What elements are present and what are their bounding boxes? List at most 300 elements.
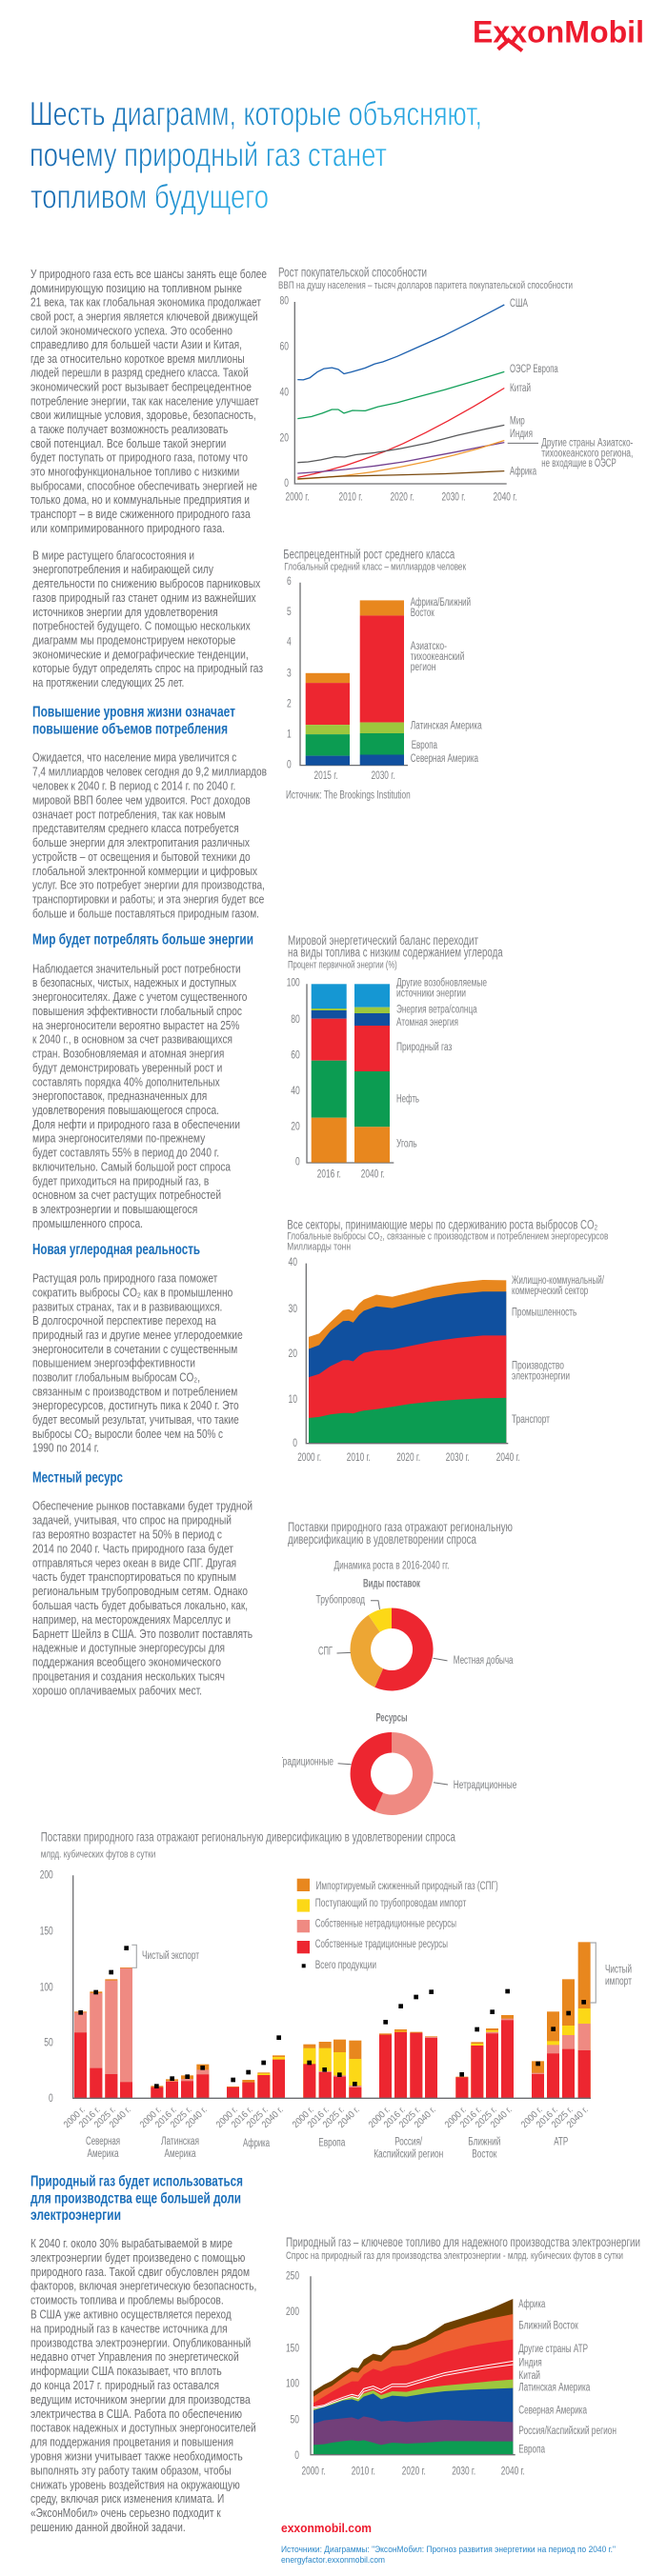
text block: power generation: информации США показывает, что вплоть <box>30 2365 222 2378</box>
rotated year labels: 2016 г. <box>306 2105 332 2130</box>
region labels <box>86 2136 568 2161</box>
text block: living standards: мировой ВВП более чем удвоится. Рост доходов <box>32 793 251 807</box>
area labels: Северная Америка <box>518 2405 587 2416</box>
rotated year labels: 2016 г. <box>77 2105 103 2130</box>
area labels: Европа <box>518 2444 545 2455</box>
callout: net export: Чистый экспорт <box>142 1950 200 1962</box>
text block: carbon reality: энергоресурсов, достигнуть пика к 2040 г. Это <box>32 1399 239 1412</box>
text block: introduction: доминирующую позицию на топливном рынке <box>30 282 242 295</box>
text block: living standards: 7,4 миллиардов человек сегодня до 9,2 миллиардов <box>32 766 267 779</box>
donut labels: supply types: Трубопровод <box>316 1595 365 1607</box>
region labels: Африка <box>243 2138 270 2149</box>
bar labels: Восток <box>411 608 435 619</box>
bar 2030 <box>360 600 404 766</box>
series labels <box>508 298 633 478</box>
donut heading: supply types: Виды поставок <box>363 1578 420 1589</box>
footer: sources: energyfactor.exxonmobil.com <box>281 2555 385 2566</box>
line chart: purchasing power <box>278 265 633 503</box>
text block: living standards <box>32 751 267 920</box>
text block: more energy: Доля нефти и природного газа в обеспечении <box>32 1118 240 1131</box>
text block: more energy: основном за счет растущих потребностей <box>32 1188 221 1202</box>
chart subtitle: млрд. кубических футов в сутки <box>41 1849 155 1861</box>
y axis labels <box>287 576 292 771</box>
text block: more energy: стран. Возобновляемая и атомная энергия <box>32 1048 224 1061</box>
text block: power generation: электроэнергии будет произведено с помощью <box>30 2251 245 2265</box>
text block: carbon reality: В долгосрочной перспективе переход на <box>32 1314 216 1328</box>
text block: living standards: Ожидается, что население мира увеличится с <box>32 751 236 765</box>
text block: introduction: транспорт – в виде сжиженного природного газа <box>30 508 251 521</box>
rotated year labels: 2025 г. <box>474 2105 499 2130</box>
text block: power generation: ведущим источником энергии для производства <box>30 2393 251 2406</box>
text block: more energy: составлять порядка 40% дополнительных <box>32 1075 220 1088</box>
text block: more energy: энергопоставок, предназначенных для <box>32 1089 207 1103</box>
y axis labels: 20 <box>291 1122 300 1133</box>
text block: introduction: людей перешли в разряд среднего класса. Такой <box>30 367 249 380</box>
donut labels: resources <box>272 1755 516 1791</box>
text block: carbon reality: развитых странах, так и в развивающихся. <box>32 1300 222 1313</box>
text block: carbon reality: сократить выбросы CO₂ как в промышленно <box>32 1286 232 1299</box>
axes <box>294 302 507 484</box>
bar labels: Северная Америка <box>411 753 478 765</box>
heading: power generation: для производства еще большей доли <box>30 2190 241 2207</box>
y axis labels: 3 <box>287 669 292 680</box>
rotated year labels: 2000 г. <box>291 2105 316 2130</box>
bars: Europe <box>303 2040 361 2098</box>
bar labels: регион <box>411 662 435 673</box>
text block: more energy: будут демонстрировать уверенный рост и <box>32 1061 222 1074</box>
y axis labels: 10 <box>288 1394 297 1406</box>
text block: carbon reality: будет весомый результат, учитывая, что такие <box>32 1413 239 1427</box>
text block: power generation: выполнять эту работу таким образом, чтобы <box>30 2464 232 2477</box>
x axis labels <box>297 1452 520 1464</box>
chart subtitle: ВВП на душу населения – тысяч долларов паритета покупательской способности <box>278 280 573 291</box>
area labels: электроэнергии <box>512 1371 570 1383</box>
region labels: Ближний <box>468 2136 500 2147</box>
x axis labels: 2040 г. <box>361 1168 385 1180</box>
area labels: Транспорт <box>512 1414 551 1426</box>
text block: more energy: промышленного спроса. <box>32 1217 143 1230</box>
callout: net import: Чистый <box>605 1965 632 1976</box>
text block: more energy: Наблюдается значительный рост потребности <box>32 962 241 975</box>
heading: living standards: повышение объемов потребления <box>32 722 228 737</box>
area labels: Промышленность <box>512 1307 576 1318</box>
chart title: на виды топлива с низким содержанием углерода <box>288 945 503 960</box>
y axis labels: 50 <box>290 2415 299 2426</box>
text block: more energy: будет приходиться на природный газ, в <box>32 1174 210 1188</box>
text block: second paragraph: диаграмм мы продемонстрируем некоторые <box>32 634 235 648</box>
rotated year labels: 2025 г. <box>397 2105 423 2130</box>
area chart: CO2 emissions <box>287 1217 608 1464</box>
stacked bar chart: middle class <box>283 547 482 801</box>
x axis labels: 2040 г. <box>496 1452 520 1464</box>
x axis labels: 2000 г. <box>297 1452 321 1464</box>
text block: more energy: энергоносителях. Даже с учетом существенного <box>32 990 247 1004</box>
text block: introduction: а также получает возможность реализовать <box>30 423 228 436</box>
region labels: Северная <box>86 2136 120 2147</box>
axis <box>73 1875 591 2098</box>
text block: living standards: представителям среднего класса потребуется <box>32 822 239 835</box>
y axis labels: 80 <box>280 295 289 307</box>
text block: carbon reality: природный газ и другие менее углеродоемкие <box>32 1328 243 1342</box>
donut labels: supply types: СПГ <box>318 1646 333 1657</box>
text block: second paragraph: деятельности по снижению выбросов парниковых <box>32 577 261 590</box>
y axis labels: 40 <box>291 1086 300 1097</box>
area labels: Китай <box>518 2370 540 2382</box>
text block: local resource: Барнетт Шейлз в США. Это позволит поставлять <box>32 1627 253 1641</box>
heading: power generation <box>30 2173 243 2224</box>
source: Источник: The Brookings Institution <box>286 789 411 801</box>
text block: carbon reality: Растущая роль природного газа поможет <box>32 1272 218 1286</box>
text block: second paragraph: на протяжении следующих 25 лет. <box>32 676 184 689</box>
bar labels: Латинская Америка <box>411 720 482 731</box>
axis <box>307 984 394 1163</box>
y axis labels: 250 <box>286 2271 299 2283</box>
text block: power generation: К 2040 г. около 30% вырабатываемой в мире <box>30 2237 232 2250</box>
y axis labels: 80 <box>291 1014 300 1026</box>
text block: carbon reality: связанным с производством и потреблением <box>32 1385 237 1398</box>
text block: local resource: например, на месторождениях Марселлус и <box>32 1613 231 1627</box>
series labels: Индия <box>510 429 533 440</box>
text block: more energy: повышения эффективности глобальный спрос <box>32 1005 242 1018</box>
text block: living standards: устройств – от освещения и бытовой техники до <box>32 850 251 864</box>
text block: introduction: это многофункциональное топливо с низкими <box>30 465 239 478</box>
rotated year labels: 2040 г. <box>489 2105 515 2130</box>
rotated year labels: 2000 г. <box>62 2105 88 2130</box>
bar labels: источники энергии <box>396 988 466 1000</box>
text block: more energy: мира энергоносителями по-прежнему <box>32 1132 206 1146</box>
text block: introduction: справедливо для большей части Азии и Китая, <box>30 338 242 351</box>
rotated year labels: 2040 г. <box>336 2105 362 2130</box>
x axis labels <box>317 1168 385 1180</box>
bar 2040 <box>354 984 390 1163</box>
bar labels <box>411 597 482 765</box>
text block: more energy: на энергоносители вероятно вырастет на 25% <box>32 1019 239 1032</box>
y axis labels: 20 <box>280 433 289 445</box>
region labels: Каспийский регион <box>374 2149 443 2161</box>
text block: second paragraph <box>32 549 263 689</box>
text block: power generation: производства электроэнергии. Опубликованный <box>30 2336 251 2349</box>
chart subtitle: Миллиарды тонн <box>287 1242 351 1253</box>
bar labels <box>396 977 487 1150</box>
series labels: Китай <box>510 383 531 394</box>
text block: more energy: включительно. Самый большой рост спроса <box>32 1160 231 1173</box>
y axis labels: 50 <box>44 2038 53 2049</box>
area labels: Ближний Восток <box>518 2320 578 2331</box>
text block: introduction: выбросами, способное обеспечивать энергией не <box>30 479 257 492</box>
y axis labels: 40 <box>288 1257 297 1268</box>
chart title: Рост покупательской способности <box>278 265 427 280</box>
region labels: Латинская <box>161 2136 199 2147</box>
y axis labels <box>40 1870 53 2105</box>
y axis labels: 200 <box>286 2306 299 2318</box>
title <box>30 95 482 215</box>
rotated year labels: 2000 г. <box>519 2105 545 2130</box>
bar 2016 <box>312 984 347 1163</box>
rotated year labels: 2025 г. <box>321 2105 347 2130</box>
text block: more energy: будет составлять 55% в период до 2040 г. <box>32 1147 219 1160</box>
x axis labels: 2040 г. <box>501 2466 525 2478</box>
donut labels: resources: Нетрадиционные <box>454 1780 516 1791</box>
x axis labels: 2030 г. <box>446 1452 470 1464</box>
x axis labels: 2000 г. <box>286 491 309 503</box>
rotated year labels: 2000 г. <box>443 2105 469 2130</box>
y axis labels: 100 <box>287 978 300 989</box>
series labels: Африка <box>510 467 536 478</box>
x axis labels: 2020 г. <box>396 1452 420 1464</box>
legend: Импортируемый сжиженный природный газ (СПГ) <box>316 1881 498 1892</box>
text block: local resource: задачей, учитывая, что спрос на природный <box>32 1514 232 1528</box>
region labels: Восток <box>472 2149 497 2161</box>
y axis labels: 2 <box>287 698 292 709</box>
text block: local resource: региональным трубопроводным сетям. Однако <box>32 1585 248 1598</box>
text block: introduction: свой рост, а энергия является ключевой движущей <box>30 310 258 324</box>
series labels: США <box>510 298 528 310</box>
title: топливом будущего <box>30 179 269 215</box>
text block: power generation: до конца 2017 г. природный газ оставался <box>30 2379 219 2392</box>
heading: living standards <box>32 705 235 737</box>
callout: net import: импорт <box>605 1976 633 1987</box>
rotated year labels: 2025 г. <box>92 2105 118 2130</box>
area layers <box>313 2299 513 2455</box>
y axis labels: 200 <box>40 1870 53 1882</box>
text block: carbon reality: позволит глобальным выбросам CO₂, <box>32 1371 200 1385</box>
text block: local resource: часть будет транспортироваться по крупным <box>32 1570 236 1584</box>
x axis labels: 2030 г. <box>452 2466 475 2478</box>
area labels: коммерческий сектор <box>512 1286 588 1297</box>
bars: Russia and Caspian <box>379 2029 437 2098</box>
text block: more energy: в электроэнергии и повышающегося <box>32 1203 197 1216</box>
text block: local resource: газ вероятно возрастет на 50% в период с <box>32 1528 222 1541</box>
axis <box>311 2276 515 2455</box>
y axis labels <box>287 978 300 1168</box>
y axis labels: 5 <box>287 607 292 618</box>
footer: website: exxonmobil.com <box>281 2521 372 2535</box>
text block: introduction: силой экономического успеха. Это особенно <box>30 324 232 337</box>
bars: Middle East <box>455 2015 514 2098</box>
text block: second paragraph: источников энергии для удовлетворения <box>32 606 218 619</box>
rotated year labels: 2040 г. <box>184 2105 210 2130</box>
bar labels: Европа <box>412 740 437 751</box>
text block: living standards: больше энергии для электропитания различных <box>32 836 251 849</box>
donut: supply types <box>351 1608 434 1690</box>
bar labels: тихоокеанский <box>411 651 464 663</box>
y axis labels: 40 <box>280 387 289 398</box>
series labels: Другие страны Азиатско- <box>541 437 633 449</box>
bars: Asia Pacific <box>532 1942 591 2098</box>
text block: power generation: «ЭксонМобил» очень серьезно подходит к <box>30 2506 221 2520</box>
text block: local resource: отправляться через океан в виде СПГ. Другая <box>32 1556 236 1569</box>
y axis labels: 100 <box>286 2378 299 2389</box>
text block: living standards: человек к 2040 г. В период с 2014 г. по 2040 г. <box>32 779 235 792</box>
chart title <box>288 1520 513 1547</box>
text block: second paragraph: потребностей будущего. С помощью нескольких <box>32 620 251 633</box>
x axis labels: 2015 г. <box>314 770 337 782</box>
text block: introduction: будет поступать от природного газа, потому что <box>30 451 248 465</box>
text block: second paragraph: энергопотребления и набирающей силу <box>32 563 214 576</box>
legend: Поступающий по трубопроводам импорт <box>315 1898 467 1909</box>
text block: introduction: экономический рост вызывает беспрецедентное <box>30 381 252 394</box>
chart subtitle: Процент первичной энергии (%) <box>288 960 397 971</box>
text block: carbon reality: выбросы CO₂ выросли более чем на 50% с <box>32 1428 223 1441</box>
text block: power generation: поставок надежных и доступных энергоносителей <box>30 2422 256 2435</box>
y axis labels <box>280 295 289 489</box>
rotated year labels: 2040 г. <box>413 2105 438 2130</box>
rotated year labels: 2040 г. <box>565 2105 591 2130</box>
text block: power generation: природного газа. Такой сдвиг обусловлен рядом <box>30 2266 250 2279</box>
legend <box>297 1879 498 1971</box>
bar labels: Энергия ветра/солнца <box>396 1004 477 1015</box>
bar labels: Нефть <box>396 1094 419 1106</box>
bar labels: Другие возобновляемые <box>396 977 487 988</box>
y axis labels <box>288 1257 297 1449</box>
text block: local resource: процветания и создания нескольких тысяч <box>32 1670 225 1684</box>
donut heading: resources: Ресурсы <box>375 1713 408 1725</box>
x axis labels: 2020 г. <box>402 2466 426 2478</box>
area labels <box>512 1275 605 1426</box>
text block: local resource <box>32 1500 253 1697</box>
heading: power generation: электроэнергии <box>30 2207 121 2224</box>
region labels: Америка <box>88 2148 119 2160</box>
text block: power generation: решению данной двойной задачи. <box>30 2521 186 2534</box>
area labels: Другие страны АТР <box>518 2344 588 2355</box>
rotated year labels: 2016 г. <box>382 2105 408 2130</box>
bar labels: Азиатско- <box>411 641 447 652</box>
y axis labels: 30 <box>288 1304 297 1315</box>
footer: sources: Источники: Диаграммы: "ЭксонМобил: Прогноз развития энергетики на период по 2040 г." <box>281 2545 616 2555</box>
rotated year labels <box>62 2105 591 2130</box>
heading: power generation: Природный газ будет использоваться <box>30 2173 243 2190</box>
rotated year labels: 2040 г. <box>108 2105 133 2130</box>
x axis labels: 2040 г. <box>494 491 516 503</box>
text block: introduction: потребление энергии, так как население улучшает <box>30 394 259 408</box>
callout: net export <box>131 1945 200 1967</box>
rotated year labels: 2000 г. <box>138 2105 164 2130</box>
x axis labels <box>314 770 394 782</box>
text block: power generation: на природный газ в качестве источника для <box>30 2322 228 2335</box>
text block: introduction: свой потенциал. Все больше такой энергии <box>30 437 226 450</box>
x axis labels: 2010 г. <box>352 2466 375 2478</box>
text block: power generation: факторов, включая энергетическую безопасность, <box>30 2280 256 2293</box>
rotated year labels: 2016 г. <box>230 2105 255 2130</box>
donut charts: supply diversification <box>272 1520 516 1815</box>
x axis labels: 2010 г. <box>339 491 362 503</box>
chart subtitle: Динамика роста в 2016-2040 гг. <box>334 1560 450 1571</box>
text block: power generation: В США уже активно осуществляется переход <box>30 2308 232 2322</box>
title: почему природный газ станет <box>30 137 387 173</box>
text block: living standards: транспортировки и работы; и эта энергия будет все <box>32 893 264 907</box>
y axis labels: 150 <box>286 2343 299 2354</box>
text block: second paragraph: экономические и демографические тенденции, <box>32 648 249 661</box>
donut labels: resources: Традиционные <box>278 1757 334 1768</box>
region labels: Россия/ <box>394 2136 423 2147</box>
rotated year labels: 2016 г. <box>535 2105 560 2130</box>
x axis labels <box>301 2466 525 2478</box>
text block: living standards: услуг. Все это потребует энергии для производства, <box>32 879 265 892</box>
x axis labels: 2020 г. <box>391 491 414 503</box>
x axis labels: 2016 г. <box>317 1168 341 1180</box>
text block: more energy: в безопасных, чистых, надежных и доступных <box>32 976 237 989</box>
donut labels: supply types: Местная добыча <box>454 1655 514 1667</box>
legend: Собственные нетрадиционные ресурсы <box>315 1918 456 1929</box>
series labels: тихоокеанского региона, <box>541 448 633 459</box>
x axis labels: 2000 г. <box>301 2466 326 2478</box>
text block: second paragraph: В мире растущего благосостояния и <box>32 549 194 562</box>
heading: carbon reality: Новая углеродная реальность <box>32 1242 200 1258</box>
area layers <box>309 1280 506 1444</box>
text block: living standards: означает рост потребления, так как новым <box>32 808 226 821</box>
y axis labels: 6 <box>287 576 292 588</box>
area labels: Латинская Америка <box>518 2382 591 2393</box>
total production markers <box>78 1946 586 2088</box>
text block: power generation <box>30 2237 256 2534</box>
donut: resources <box>351 1732 434 1815</box>
axis <box>306 1264 508 1444</box>
chart title: Поставки природного газа отражают региональную диверсификацию в удовлетворении спроса <box>41 1830 455 1844</box>
bar labels: Природный газ <box>396 1042 452 1053</box>
y axis labels: 0 <box>287 760 292 771</box>
text block: more energy: к 2040 г., в основном за счет развивающихся <box>32 1033 232 1047</box>
donut labels: supply types <box>316 1595 514 1667</box>
text block: local resource: Обеспечение рынков поставками будет трудной <box>32 1500 253 1513</box>
text block: introduction: У природного газа есть все шансы занять еще более <box>30 268 267 281</box>
chart title: диверсификацию в удовлетворении спроса <box>288 1532 476 1547</box>
title: Шесть диаграмм, которые объясняют, <box>30 95 482 133</box>
area labels: Производство <box>512 1361 564 1372</box>
text block: carbon reality <box>32 1272 243 1455</box>
rotated year labels: 2016 г. <box>458 2105 484 2130</box>
y axis labels: 100 <box>40 1982 53 1993</box>
chart title: Беспрецедентный рост среднего класса <box>283 547 455 561</box>
bar labels: Атомная энергия <box>396 1017 458 1028</box>
text block: introduction: свои жилищные условия, здоровье, безопасность, <box>30 409 256 422</box>
axis <box>300 583 408 766</box>
x axis labels: 2030 г. <box>442 491 465 503</box>
text block: second paragraph: газов природный газ станет одним из важнейших <box>32 591 256 605</box>
rotated year labels: 2025 г. <box>169 2105 194 2130</box>
area chart: gas for power generation <box>286 2235 640 2478</box>
bars: Latin America <box>151 2065 209 2098</box>
text block: power generation: уровня жизни учитывает также необходимость <box>30 2449 243 2463</box>
text block: living standards: больше и больше поставляться природным газом. <box>32 907 259 920</box>
y axis labels: 0 <box>294 2450 299 2462</box>
chart subtitle <box>287 1230 608 1253</box>
text block: local resource: большая часть будет добываться локально, как, <box>32 1599 248 1612</box>
series lines <box>297 305 504 479</box>
bars: North America <box>74 1967 132 2098</box>
region labels: Европа <box>318 2137 346 2148</box>
x axis labels: 2010 г. <box>347 1452 371 1464</box>
area labels: Жилищно-коммунальный/ <box>512 1275 605 1287</box>
text block: introduction: или компримированного природного газа. <box>30 522 225 535</box>
footer: sources <box>281 2545 616 2566</box>
rotated year labels: 2000 г. <box>214 2105 240 2130</box>
text block: carbon reality: повышением энергоэффективности <box>32 1357 195 1370</box>
x axis labels: 2030 г. <box>372 770 394 782</box>
chart title <box>288 933 503 960</box>
bar labels: Уголь <box>396 1139 417 1150</box>
bar labels: Африка/Ближний <box>411 597 471 609</box>
series labels: не входящие в ОЭСР <box>541 458 616 469</box>
y axis labels: 4 <box>287 637 292 649</box>
region labels: АТР <box>554 2136 568 2147</box>
y axis labels: 0 <box>49 2093 53 2105</box>
chart title: Поставки природного газа отражают региональную <box>288 1520 513 1534</box>
y axis labels: 0 <box>293 1438 297 1449</box>
rotated year labels: 2025 г. <box>245 2105 271 2130</box>
legend: Всего продукции <box>315 1960 376 1971</box>
logo: ExxonMobil: ExxonMobil <box>473 15 644 50</box>
bar 2015 <box>306 673 350 766</box>
